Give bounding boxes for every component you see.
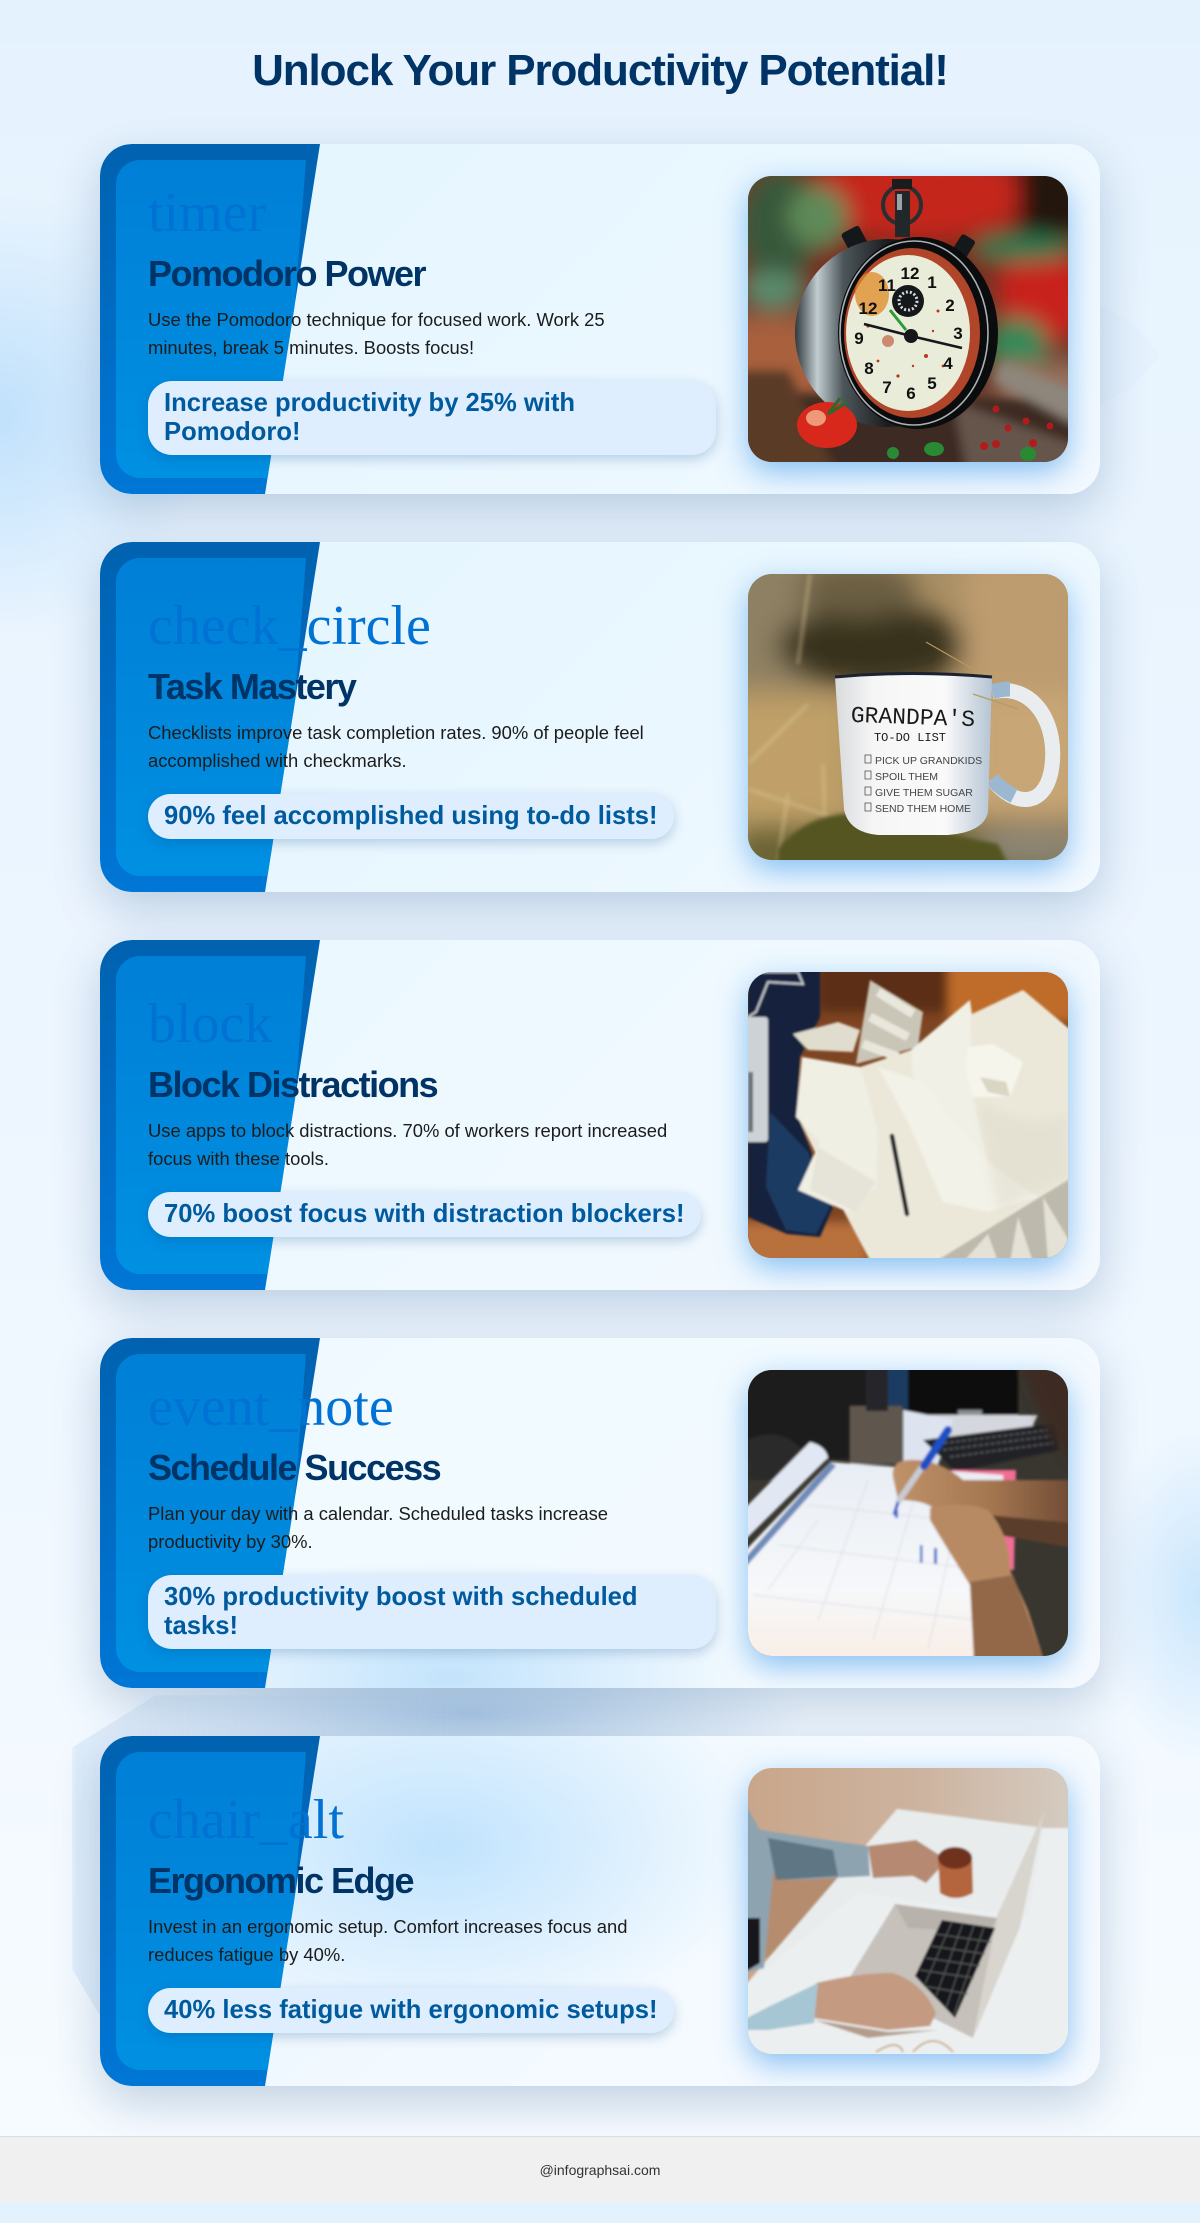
- description: [148, 1120, 667, 1169]
- accent shape: [100, 1736, 320, 2086]
- clock numerals: 12: [901, 264, 919, 283]
- heading: Schedule Success: [148, 1447, 440, 1488]
- panel: Ergonomic Edge: [100, 1736, 1100, 2086]
- text block: Block Distractions: [146, 992, 706, 1248]
- callout: [148, 380, 716, 455]
- laptop: [973, 1810, 1045, 2038]
- crown: [883, 186, 921, 224]
- callout: tasks!: [164, 1612, 238, 1640]
- clock numerals: [854, 264, 963, 403]
- callout: [148, 1574, 716, 1649]
- callout: 30% productivity boost with scheduled: [164, 1582, 638, 1610]
- hand with cup: [868, 1840, 941, 1883]
- description: [148, 1503, 608, 1552]
- icon: check_circle: check_circle: [148, 594, 431, 656]
- callout: Increase productivity by 25% with: [164, 388, 575, 416]
- tomato and seeds: [797, 402, 857, 448]
- shirt: [743, 1800, 870, 1973]
- text block: Task Mastery: [146, 594, 680, 850]
- clock numerals: 7: [882, 378, 892, 397]
- clock numerals: 8: [864, 359, 874, 378]
- title: Unlock Your Productivity Potential!: [252, 46, 948, 95]
- callout: Pomodoro!: [164, 418, 300, 446]
- description: Invest in an ergonomic setup. Comfort increases focus and: [148, 1916, 627, 1937]
- image: crumpled paper desk: [748, 972, 1068, 1258]
- image: to-do list mug: GRANDPA'S: [850, 703, 975, 733]
- clock numerals: 2: [945, 296, 955, 315]
- image: to-do list mug: SEND THEM HOME: [875, 803, 971, 815]
- footer: @infographsai.com: [540, 2162, 660, 2178]
- description: Checklists improve task completion rates. 90% of people feel: [148, 722, 644, 743]
- clock numerals: 4: [943, 354, 953, 373]
- heading: Ergonomic Edge: [148, 1860, 413, 1901]
- image: writing on a calendar: [748, 1370, 1068, 1656]
- image: to-do list mug: GIVE THEM SUGAR: [875, 787, 973, 799]
- callout: [148, 794, 674, 839]
- description: Use the Pomodoro technique for focused work. Work 25: [148, 309, 605, 330]
- clock numerals: 5: [927, 374, 937, 393]
- paper roll: [743, 1442, 828, 1542]
- pen: [892, 1136, 907, 1214]
- description: accomplished with checkmarks.: [148, 750, 407, 771]
- arms and hands: [893, 1460, 1073, 1528]
- image: to-do list mug: [748, 574, 1068, 860]
- panel: Pomodoro Power: [100, 144, 1100, 494]
- clock numerals: 9: [854, 329, 864, 348]
- lower hand and cuff: [814, 1973, 936, 2030]
- heading: Pomodoro Power: [148, 253, 425, 294]
- text block: Schedule Success: [146, 1376, 722, 1660]
- case: [795, 239, 981, 427]
- panel: Block Distractions: [100, 940, 1100, 1290]
- clock numerals: 6: [906, 384, 916, 403]
- description: focus with these tools.: [148, 1148, 329, 1169]
- description: Plan your day with a calendar. Scheduled tasks increase: [148, 1503, 608, 1524]
- image: to-do list mug: PICK UP GRANDKIDS: [875, 755, 982, 767]
- description: minutes, break 5 minutes. Boosts focus!: [148, 337, 474, 358]
- glasses: [876, 2041, 953, 2052]
- calendar: [743, 1462, 1006, 1660]
- pink folder: [938, 1470, 1016, 1570]
- heading: Task Mastery: [148, 666, 355, 707]
- clock numerals: 3: [953, 324, 963, 343]
- desk: [743, 1809, 1073, 2058]
- icon: event_note: event_note: [148, 1376, 394, 1438]
- callout: 70% boost focus with distraction blockers!: [164, 1200, 684, 1228]
- description: [148, 1916, 627, 1965]
- panel: Schedule Success: [100, 1338, 1100, 1688]
- clock numerals: 12: [859, 299, 877, 318]
- callout: [148, 1192, 700, 1237]
- panel: Task Mastery: [100, 542, 1100, 892]
- mug: [992, 691, 1053, 800]
- callout: 90% feel accomplished using to-do lists!: [164, 802, 658, 830]
- callout: 40% less fatigue with ergonomic setups!: [164, 1996, 658, 2024]
- description: [148, 309, 605, 358]
- heading: Block Distractions: [148, 1064, 437, 1105]
- description: reduces fatigue by 40%.: [148, 1944, 345, 1965]
- accent shape: [100, 940, 320, 1290]
- striped cloth: [935, 1177, 1073, 1262]
- image: laptop on white desk: [748, 1768, 1068, 2054]
- accent shape: [100, 144, 320, 494]
- text block: Pomodoro Power: [146, 182, 722, 466]
- paper sheets: [798, 990, 1073, 1262]
- image: to-do list mug: TO-DO LIST: [874, 731, 946, 745]
- description: productivity by 30%.: [148, 1531, 313, 1552]
- icon: timer: timer: [148, 182, 266, 244]
- footer: [0, 2136, 1200, 2203]
- accent shape: [100, 542, 320, 892]
- clock numerals: 1: [927, 273, 937, 292]
- image: to-do list mug: SPOIL THEM: [875, 771, 938, 783]
- text block: Ergonomic Edge: [146, 1788, 680, 2044]
- icon: chair_alt: chair_alt: [148, 1788, 344, 1850]
- image: stopwatch: [748, 176, 1068, 462]
- icon: block: block: [148, 992, 272, 1054]
- callout: [148, 1988, 674, 2033]
- accent shape: [100, 1338, 320, 1688]
- clock numerals: 11: [878, 276, 896, 295]
- description: [148, 722, 644, 771]
- description: Use apps to block distractions. 70% of workers report increased: [148, 1120, 667, 1141]
